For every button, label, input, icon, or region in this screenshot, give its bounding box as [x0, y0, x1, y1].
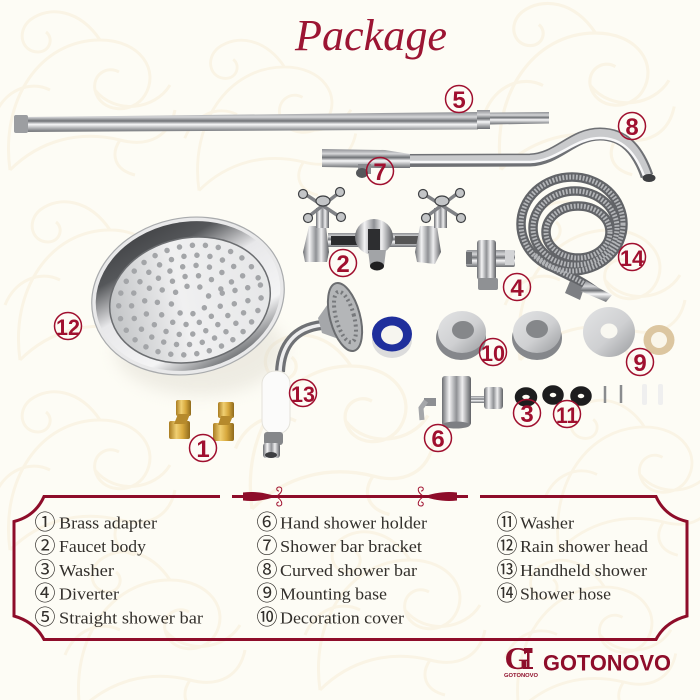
legend column 3: ⑪: [496, 512, 518, 534]
number badge 8: 8: [625, 114, 639, 141]
number badge 3: 3: [520, 401, 534, 428]
legend column 2: ⑩: [256, 606, 278, 630]
legend column 3: Handheld shower: [520, 561, 647, 580]
brand logo: G: [505, 640, 530, 676]
legend column 2: [256, 512, 427, 630]
legend column 2: ⑨: [256, 582, 278, 606]
number badge 9: 9: [633, 350, 647, 377]
legend column 2: Mounting base: [280, 584, 387, 604]
legend column 1: [34, 512, 203, 630]
legend column 3: Washer: [520, 514, 574, 532]
number badge 12: 12: [56, 315, 80, 340]
number badge 6: [424, 424, 452, 453]
number badge 4: 4: [510, 275, 524, 302]
legend column 2: ⑥: [256, 512, 278, 534]
legend column 3: [496, 512, 649, 606]
legend column 1: Washer: [59, 561, 114, 580]
number badge 2: 2: [336, 251, 350, 278]
legend column 2: Decoration cover: [280, 608, 404, 628]
washers: [518, 389, 588, 403]
faucet body: [298, 188, 466, 270]
brand logo: GOTONOVO: [504, 673, 539, 679]
number badge 6: 6: [431, 426, 445, 453]
legend column 3: ⑫: [496, 535, 518, 558]
legend column 2: ⑧: [256, 559, 278, 582]
legend column 1: ④: [34, 582, 56, 606]
number badge 1: 1: [196, 436, 210, 463]
legend column 1: Diverter: [59, 584, 119, 604]
hand shower holder: [421, 376, 503, 428]
shower hose: [521, 177, 623, 302]
number badge 8: [618, 112, 646, 141]
number badge 14: 14: [620, 246, 645, 271]
legend column 3: Rain shower head: [520, 537, 649, 556]
legend column 1: Faucet body: [59, 537, 147, 556]
number badge 9: [626, 348, 654, 377]
number badge 7: [366, 158, 394, 186]
number badge 1: [190, 434, 216, 463]
legend column 3: Shower hose: [520, 584, 611, 604]
number badge 7: 7: [373, 159, 387, 186]
brand logo: GOTONOVO: [543, 650, 671, 676]
number badge 4: [504, 274, 530, 302]
straight shower bar: [14, 110, 549, 133]
legend column 1: ①: [34, 512, 56, 534]
number badge 10: 10: [481, 341, 505, 366]
title: Package: [294, 11, 447, 60]
legend column 2: Shower bar bracket: [280, 537, 422, 556]
number badge 5: [446, 86, 472, 114]
legend column 3: ⑭: [496, 582, 518, 606]
teflon tape: [372, 316, 412, 358]
legend column 1: ⑤: [34, 606, 56, 630]
legend column 1: Brass adapter: [59, 514, 157, 532]
number badge 11: 11: [556, 403, 578, 428]
legend column 2: Hand shower holder: [280, 514, 427, 532]
rain shower head: [77, 200, 299, 395]
brass adapters: [169, 400, 234, 441]
diverter: [466, 240, 515, 290]
mounting base: [583, 307, 674, 357]
legend column 3: ⑬: [496, 559, 518, 582]
legend frame: [14, 487, 687, 640]
number badge 3: [514, 400, 540, 428]
decoration covers: [436, 311, 562, 360]
number badge 5: 5: [452, 87, 466, 114]
brand logo: [504, 640, 671, 679]
handheld shower: [262, 279, 369, 458]
screws and anchors: [605, 384, 663, 405]
number badge 2: [330, 250, 356, 278]
legend column 1: ②: [34, 535, 56, 558]
curved shower bar: [322, 133, 656, 182]
legend column 1: Straight shower bar: [59, 608, 203, 628]
number badge 13: 13: [291, 382, 315, 407]
legend column 1: ③: [34, 559, 56, 582]
shower bar bracket: [356, 164, 371, 178]
legend column 2: Curved shower bar: [280, 561, 417, 580]
legend column 2: ⑦: [256, 535, 278, 558]
